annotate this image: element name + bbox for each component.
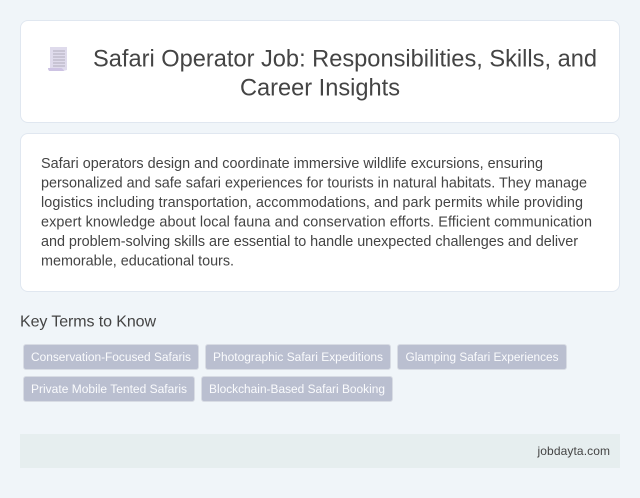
text: description: Safari operators design and coordinate immersive wildlife excursions, ensuring: [41, 156, 543, 172]
text: description: memorable, educational tours.: [41, 254, 234, 270]
tag background: private mobile: [23, 376, 195, 402]
text: description: and problem-solving skills are essential to handle unexpected challenges and deliver: [41, 234, 578, 250]
text: description: expert knowledge about local fauna and conservation efforts. Efficient communication: [41, 214, 592, 230]
tag label: private mobile: Private Mobile Tented Safaris: [31, 382, 187, 396]
footer bar: [20, 434, 620, 468]
tag label: blockchain: Blockchain-Based Safari Booking: [209, 382, 385, 396]
heading: title line 1: Safari Operator Job: Responsibilities, Skills, and: [93, 46, 597, 72]
footer: source: jobdayta.com: [536, 444, 610, 458]
text: description: logistics including transportation, accommodations, and park permits while providing: [41, 195, 583, 211]
tag background: photographic: [205, 344, 391, 370]
tag background: blockchain: [201, 376, 393, 402]
heading: title line 2: Career Insights: [240, 74, 400, 102]
heading: key terms: Key Terms to Know: [20, 314, 156, 330]
text: description: personalized and safe safari experiences for tourists in natural habitats. They manage: [41, 176, 587, 192]
tag background: conservation: [23, 344, 199, 370]
tag background: glamping: [397, 344, 567, 370]
panel: description card: [20, 133, 620, 292]
text: description: [41, 156, 592, 270]
panel: title card: [20, 20, 620, 123]
tag label: photographic: Photographic Safari Expeditions: [213, 350, 383, 364]
icon: paper document: [48, 47, 67, 71]
tag label: conservation: Conservation-Focused Safaris: [31, 350, 191, 364]
tag label: glamping: Glamping Safari Experiences: [406, 350, 558, 364]
